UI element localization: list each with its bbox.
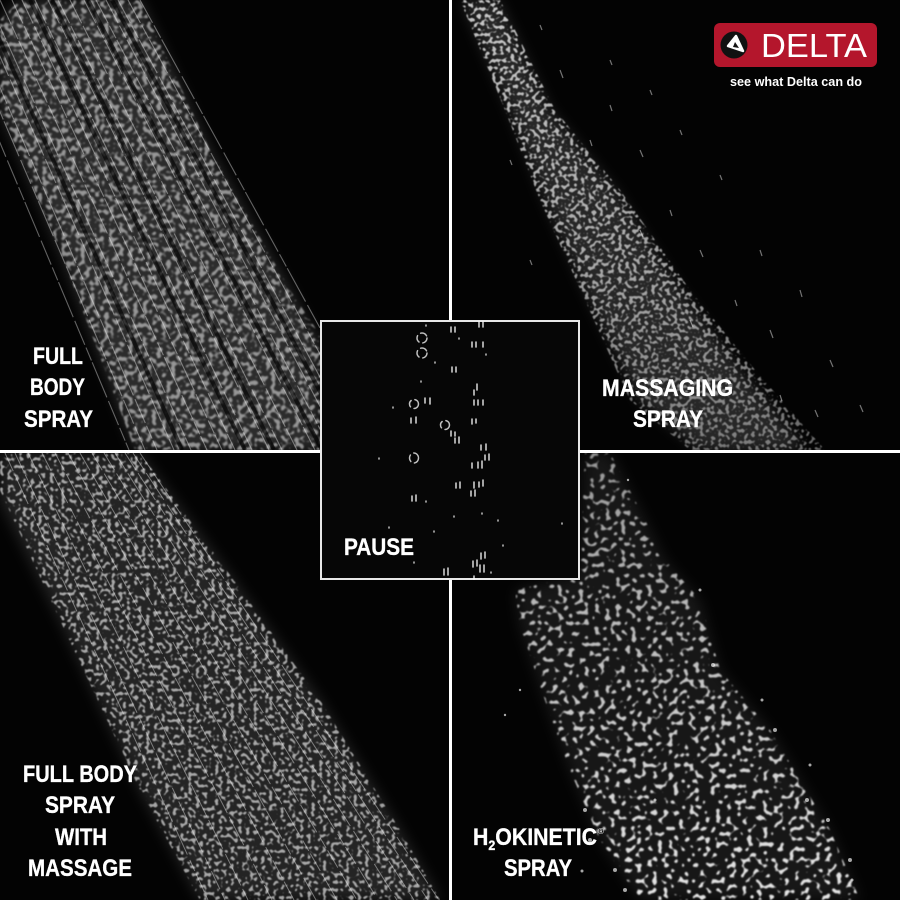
- label: massaging spray: [603, 379, 732, 428]
- water droplets: pause: [379, 322, 562, 579]
- label: h2okinetic spray: [474, 828, 604, 876]
- logo badge: [714, 23, 877, 67]
- label: h2okinetic spray: ®: [598, 827, 604, 836]
- water streaks: spray with massage: [5, 453, 439, 900]
- water droplets: massaging spray: [460, 0, 825, 450]
- pause frame: [321, 321, 579, 579]
- label: spray with massage: MASSAGE: [28, 855, 132, 882]
- water droplets: full body spray: [0, 0, 330, 450]
- stray droplets: massaging spray: [510, 25, 863, 417]
- panel: massaging spray: [460, 0, 863, 450]
- label: h2okinetic spray: OKINETIC: [495, 824, 597, 851]
- label: h2okinetic spray: SPRAY: [504, 855, 572, 882]
- logo tagline: see what Delta can do: [730, 75, 862, 89]
- label: spray with massage: FULL BODY: [23, 761, 137, 788]
- tiny specks: [379, 325, 562, 573]
- divider: vertical bottom: [449, 578, 452, 900]
- label: pause: PAUSE: [344, 534, 414, 561]
- small drop pairs: [411, 322, 489, 579]
- label: spray with massage: [23, 761, 137, 882]
- water glow: spray with massage: [0, 453, 440, 900]
- water droplets: h2okinetic spray: [515, 453, 860, 900]
- water glow: h2okinetic spray: [515, 453, 860, 900]
- panel: full body spray: [0, 0, 320, 450]
- dark gaps: full body spray: [0, 0, 351, 450]
- water glow: massaging spray: [462, 0, 805, 450]
- label: full body spray: [24, 347, 93, 428]
- label: h2okinetic spray: H: [473, 824, 490, 851]
- label: massaging spray: MASSAGING: [602, 375, 733, 402]
- label: massaging spray: SPRAY: [633, 406, 703, 433]
- panel: pause: [321, 321, 579, 579]
- label: h2okinetic spray: 2: [488, 837, 495, 853]
- divider: vertical top: [449, 0, 452, 322]
- label: spray with massage: SPRAY: [45, 792, 115, 819]
- stray droplets: h2okinetic spray: [504, 479, 854, 892]
- logo: delta: [714, 23, 877, 89]
- label: full body spray: SPRAY: [24, 406, 93, 433]
- label: full body spray: FULL: [33, 343, 83, 370]
- divider: horizontal right: [578, 450, 900, 453]
- panel: full body spray with massage: [0, 453, 440, 900]
- water droplets: spray with massage: [0, 453, 440, 900]
- logo wordmark: DELTA: [761, 27, 867, 64]
- label: full body spray: BODY: [30, 374, 85, 401]
- panel: h2okinetic spray: [473, 453, 860, 900]
- water streaks: full body spray: [0, 0, 320, 450]
- divider: horizontal left: [0, 450, 322, 453]
- water glow: full body spray: [0, 0, 320, 450]
- label: spray with massage: WITH: [55, 824, 107, 851]
- icon: delta emblem: [720, 32, 748, 58]
- large bubbles: [410, 333, 450, 463]
